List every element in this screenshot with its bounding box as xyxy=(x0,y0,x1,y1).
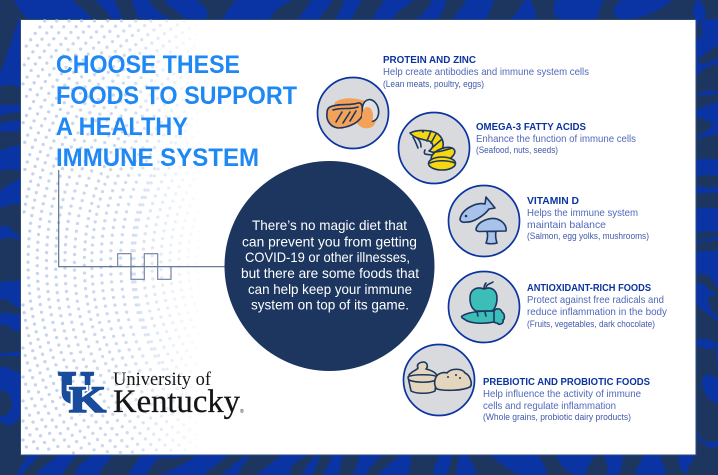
icon: shrimp and shells xyxy=(398,112,470,184)
title: CHOOSE THESE xyxy=(56,51,240,79)
university of kentucky logo: ® xyxy=(240,408,244,415)
central circle with message: can prevent you from getting xyxy=(242,234,417,250)
title: A HEALTHY xyxy=(56,113,188,141)
prebiotic text: (Whole grains, probiotic dairy products) xyxy=(483,412,631,422)
central circle with message: There’s no magic diet that xyxy=(252,218,407,233)
left band xyxy=(0,19,20,72)
bottom band xyxy=(22,455,58,475)
title: IMMUNE SYSTEM xyxy=(56,144,259,172)
icon: steak and egg xyxy=(318,78,388,148)
central circle with message: but there are some foods that xyxy=(241,266,419,281)
protein and zinc text: PROTEIN AND ZINC xyxy=(383,55,476,66)
icon: fish and mushroom xyxy=(448,186,520,256)
omega-3 text: (Seafood, nuts, seeds) xyxy=(476,145,558,155)
protein and zinc text: Help create antibodies and immune system cells xyxy=(383,66,589,78)
vitamin d text: (Salmon, egg yolks, mushrooms) xyxy=(527,231,649,241)
prebiotic text: PREBIOTIC AND PROBIOTIC FOODS xyxy=(483,377,650,388)
vitamin d text xyxy=(527,196,649,241)
prebiotic text: cells and regulate inflammation xyxy=(483,400,616,412)
connector line with pulse wave xyxy=(59,170,230,279)
halftone dot arcs xyxy=(21,19,191,454)
right band xyxy=(696,19,702,40)
prebiotic text: Help influence the activity of immune xyxy=(483,388,641,400)
vitamin d text: VITAMIN D xyxy=(527,196,579,207)
university of kentucky logo: Kentucky xyxy=(113,384,240,420)
protein and zinc text xyxy=(383,55,589,89)
top band xyxy=(0,0,28,19)
university of kentucky logo: U xyxy=(58,363,94,413)
title xyxy=(56,51,297,172)
icon: yogurt and bread xyxy=(404,344,474,416)
vitamin d text: maintain balance xyxy=(527,219,606,231)
university of kentucky logo: K xyxy=(69,380,106,421)
central circle with message: system on top of its game. xyxy=(251,298,409,312)
university of kentucky logo: University of xyxy=(113,370,212,390)
university of kentucky logo: K xyxy=(69,380,106,421)
protein and zinc text: (Lean meats, poultry, eggs) xyxy=(383,79,484,89)
antioxidant text: (Fruits, vegetables, dark chocolate) xyxy=(527,319,655,329)
central circle with message: can help keep your immune xyxy=(248,282,412,297)
university of kentucky logo xyxy=(58,363,244,421)
central circle with message: COVID-19 or other illnesses, xyxy=(245,250,410,265)
omega-3 text: Enhance the function of immune cells xyxy=(476,133,636,145)
antioxidant text: reduce inflammation in the body xyxy=(527,306,668,318)
antioxidant text xyxy=(527,283,668,329)
title: FOODS TO SUPPORT xyxy=(56,82,297,110)
omega-3 text xyxy=(476,122,636,155)
icon: apple and carrot xyxy=(448,272,520,342)
prebiotic text xyxy=(483,377,650,422)
antioxidant text: ANTIOXIDANT-RICH FOODS xyxy=(527,283,651,294)
central circle with message xyxy=(224,161,434,371)
omega-3 text: OMEGA-3 FATTY ACIDS xyxy=(476,122,586,133)
vitamin d text: Helps the immune system xyxy=(527,207,638,219)
antioxidant text: Protect against free radicals and xyxy=(527,294,664,306)
